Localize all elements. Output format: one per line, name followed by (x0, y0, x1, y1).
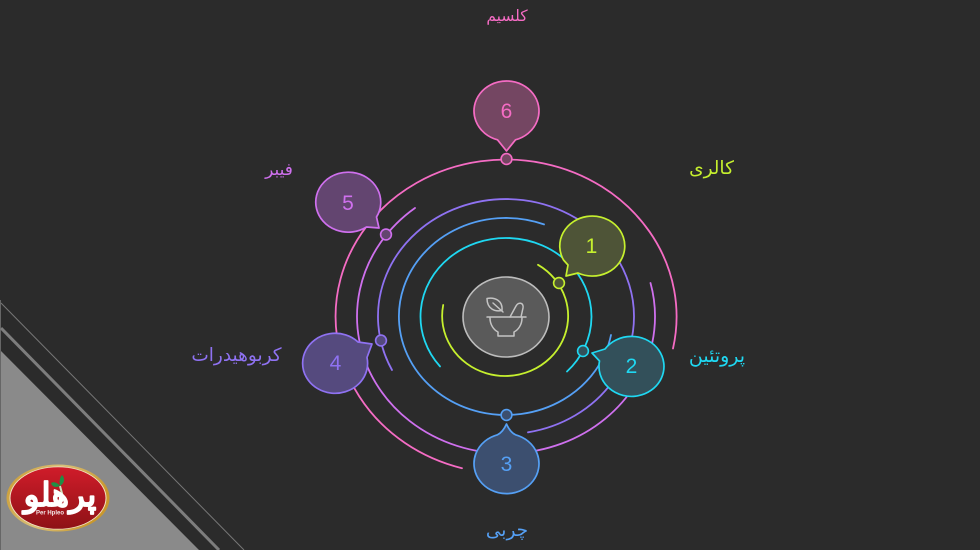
center circle with mortar and leaf icon (463, 277, 549, 357)
logo: Par Holoo brand oval: پرهلو (22, 476, 96, 514)
label: fat: چربی (486, 519, 528, 541)
ring: pink (calcium) (336, 160, 677, 468)
label: fiber: فیبر (264, 160, 293, 179)
ring: blue (fat) (399, 218, 611, 415)
label: calcium: کلسیم (486, 8, 528, 25)
ring: purple (carbohydrates) (378, 199, 634, 432)
callout 5 (316, 172, 381, 232)
node 2 (578, 346, 588, 356)
node 1 (554, 278, 564, 288)
callout 5: 5 (342, 192, 354, 215)
callout 3 (474, 424, 539, 494)
callout 1: 1 (586, 235, 597, 258)
callout 6: 6 (501, 100, 512, 123)
callout 2 (592, 336, 664, 396)
corner decoration: grey triangle and diagonal lines (0, 300, 244, 550)
callout 3: 3 (501, 453, 512, 476)
node 3 (501, 410, 512, 420)
node 4 (376, 335, 386, 346)
ring: lime (calories) (442, 265, 568, 376)
labels (191, 8, 745, 541)
node 6 (501, 154, 512, 164)
callout 4: 4 (330, 352, 342, 375)
nodes on rings (376, 154, 588, 420)
label: carbohydrates: کربوهیدرات (191, 344, 282, 366)
callout 2: 2 (626, 355, 637, 378)
callout 4 (303, 333, 372, 393)
orbit rings (336, 160, 677, 468)
logo: Par Holoo brand oval: Per Hpleo (36, 510, 64, 516)
callout 1 (560, 216, 625, 276)
logo: Par Holoo brand oval (6, 464, 110, 532)
label: protein: پروتئین (689, 346, 745, 367)
ring: cyan (protein) (420, 238, 591, 372)
node 5 (381, 229, 391, 240)
callout 6 (474, 81, 539, 151)
label: calories: کالری (689, 157, 734, 179)
ring: magenta (fiber) (357, 208, 655, 453)
icon: mortar, pestle and leaf (487, 298, 526, 336)
